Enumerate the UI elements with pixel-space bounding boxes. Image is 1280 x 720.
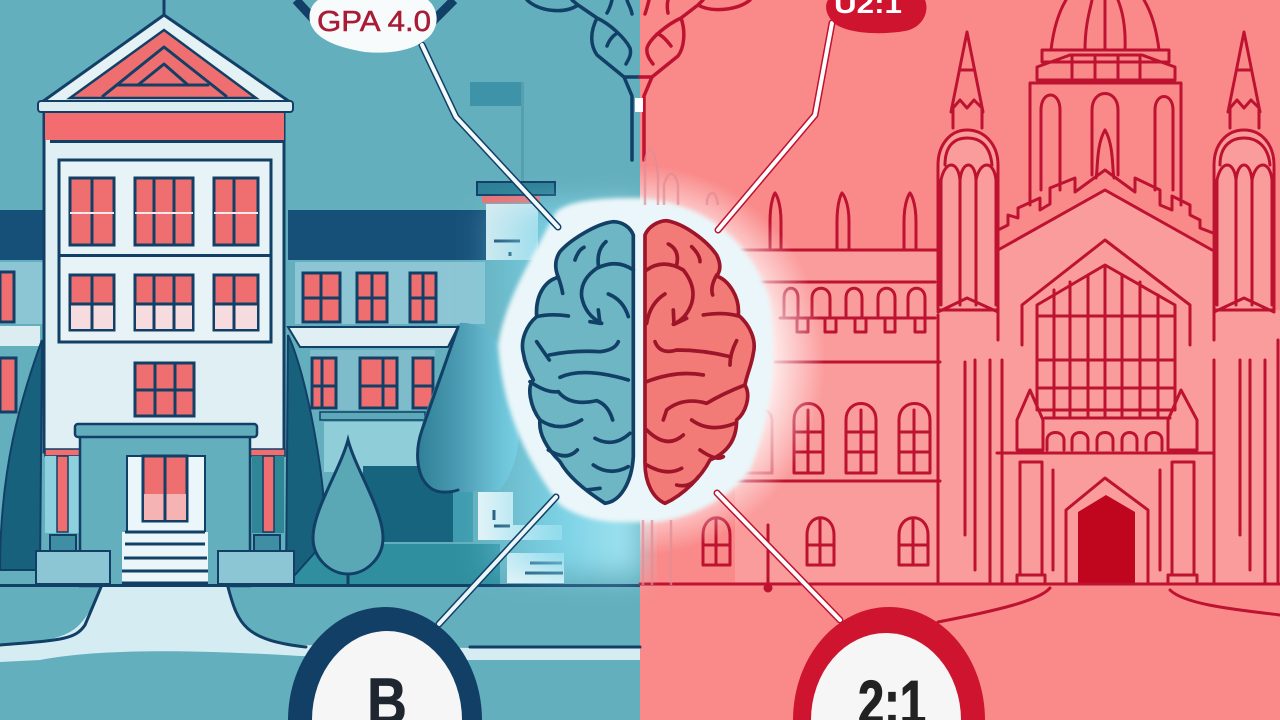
west wing windows (703, 404, 940, 585)
right hemisphere (645, 221, 754, 503)
teardrop tree (313, 440, 383, 585)
building wall fill (735, 130, 1280, 584)
columns (45, 449, 285, 552)
connector: brain to B grade (439, 497, 556, 624)
windows second row (70, 275, 258, 330)
ground line (0, 584, 640, 587)
badge: GPA 4.0: GPA 4.0 (317, 6, 431, 38)
left turret (938, 32, 998, 312)
stack of books and papers (478, 492, 564, 583)
connector: U2:1 badge to brain (718, 23, 832, 230)
vine tree: UK side (640, 0, 750, 160)
pediment roof (42, 0, 290, 102)
faint building details inside the glow (643, 149, 718, 585)
windows first row (70, 178, 258, 245)
dome (1037, 0, 1175, 80)
tall dark tree, left of tower (0, 340, 42, 570)
left hemisphere (522, 222, 633, 503)
icon: brain, two coloured halves (522, 221, 754, 503)
panel: US campus background (0, 0, 640, 720)
ground line and paths (640, 584, 1280, 622)
tower body (44, 112, 284, 452)
connector: brain to 2:1 grade (717, 493, 840, 620)
window frame (59, 160, 271, 342)
tall dark tree, right of tower (286, 335, 326, 585)
entrance steps (122, 532, 208, 585)
lower verticals under turrets (938, 250, 1278, 584)
right wing (288, 210, 500, 585)
battlements (998, 170, 1213, 233)
centre glow behind brain (470, 98, 825, 575)
flag and pole in the background (470, 82, 524, 190)
planters (36, 551, 294, 584)
front path and lawns (0, 587, 640, 662)
panel: US college building (0, 0, 640, 662)
lower arcade and portal (997, 390, 1214, 584)
grade circle: B (288, 607, 482, 720)
left wing (0, 210, 44, 412)
portal door (1078, 495, 1135, 584)
pinnacles and west roofline (740, 193, 938, 282)
cornice (38, 101, 293, 112)
chimney block (477, 182, 555, 260)
red band (45, 113, 284, 140)
central tower (1030, 83, 1181, 205)
grade circle: 2:1 (793, 607, 985, 720)
gable (998, 190, 1212, 345)
badge: GPA 4.0 (296, 0, 454, 53)
porch (75, 424, 257, 586)
panel: UK campus background (640, 0, 1280, 720)
great window (1037, 265, 1175, 418)
upper door window (135, 363, 194, 416)
large soft tree (417, 323, 519, 542)
vine tree: US side (527, 0, 640, 160)
panel: UK gothic college building (640, 0, 1280, 622)
badge: U2:1 (826, 0, 926, 33)
right turret (1214, 32, 1274, 312)
upper arcade of west wing (775, 288, 940, 362)
connector: GPA badge to brain (422, 45, 558, 227)
